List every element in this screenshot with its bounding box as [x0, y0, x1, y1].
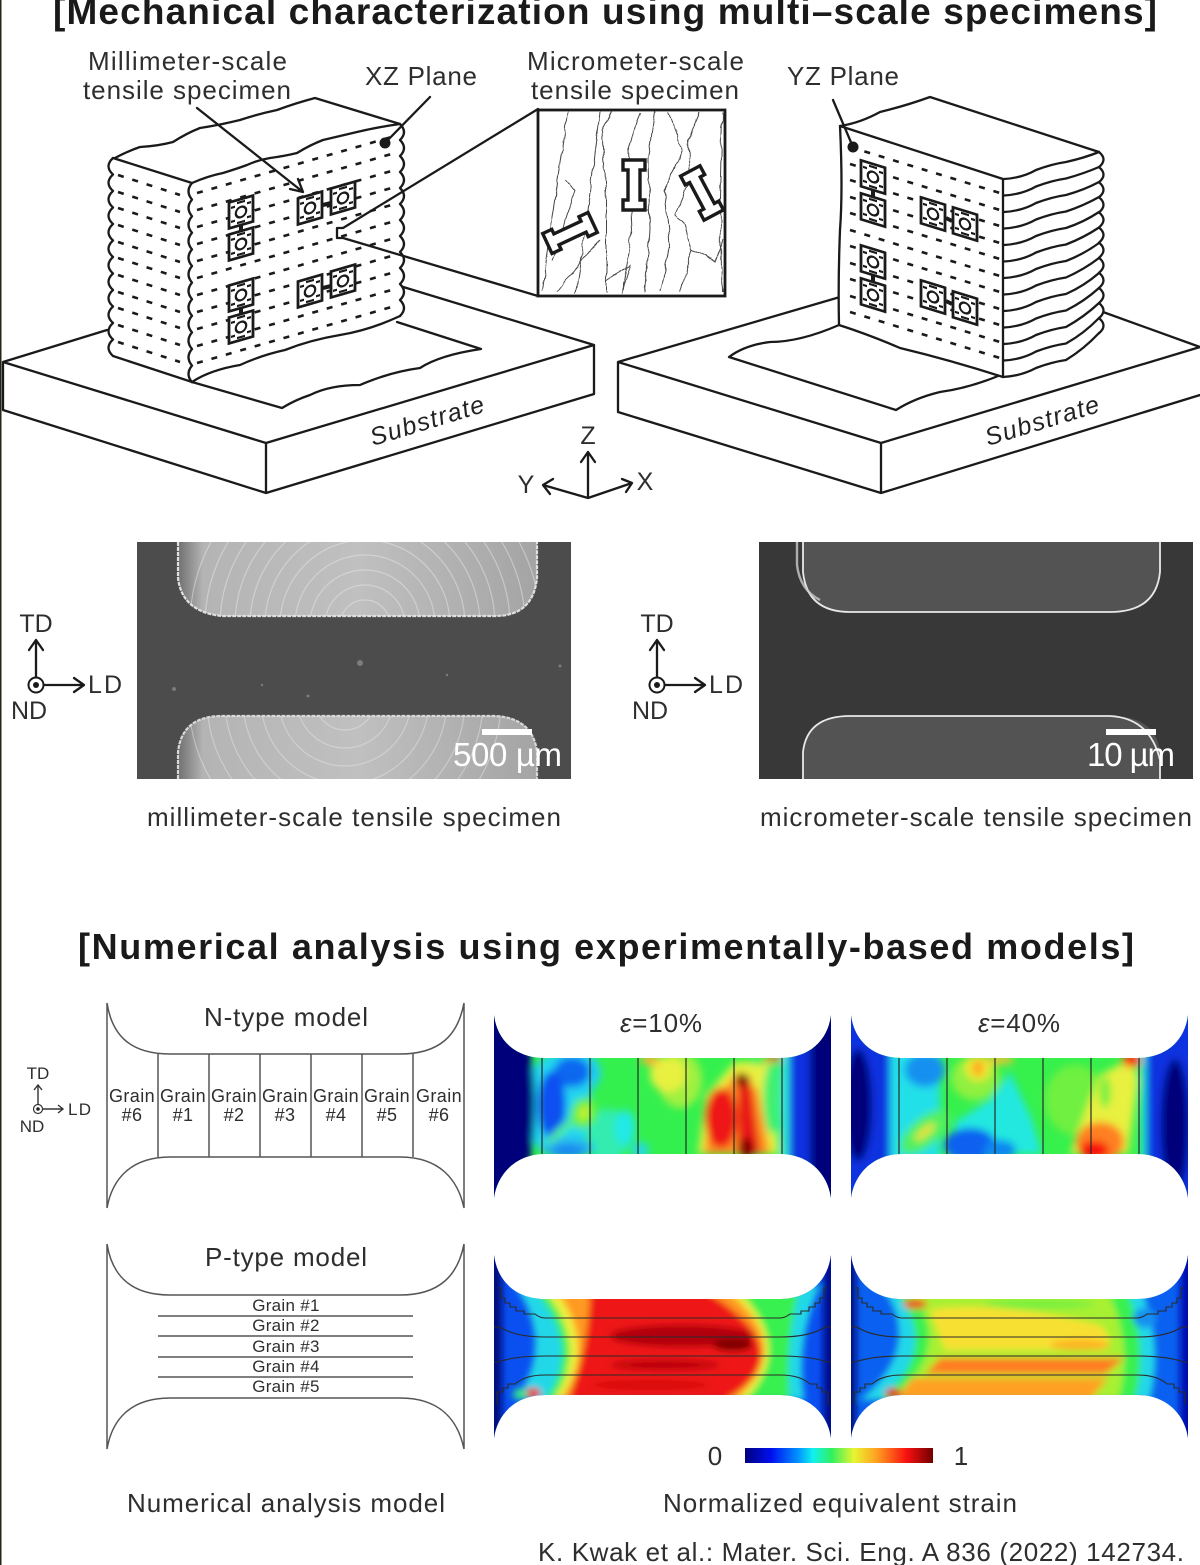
title: numerical analysis: [Numerical analysis using experimentally-based models] — [78, 926, 1134, 967]
model: N-type: Grain — [160, 1086, 206, 1106]
labels: top schematic: tensile specimen — [83, 75, 291, 105]
micrograph: millimeter-scale specimen — [137, 542, 571, 779]
model: N-type: #6 — [429, 1105, 449, 1125]
XZ plane pointer — [380, 97, 430, 148]
axes: TD LD ND right: LD — [709, 671, 743, 699]
heat map: P-type strain 10% — [494, 1255, 831, 1438]
axes: XYZ: X — [637, 468, 654, 496]
model: P-type: P-type model — [205, 1242, 367, 1272]
axes: small TD LD ND: TD — [27, 1064, 49, 1083]
colorbar legend: 0 — [708, 1441, 722, 1471]
millimeter specimen arrow — [197, 108, 303, 192]
axes: TD LD ND right — [632, 610, 743, 725]
model: N-type: Grain — [313, 1086, 359, 1106]
colorbar legend — [708, 1441, 968, 1471]
deposited block: left — [108, 98, 404, 382]
caption: numerical analysis model: Numerical analysis model — [127, 1488, 445, 1518]
model: N-type: #6 — [122, 1105, 142, 1125]
caption: micrometer-scale: micrometer-scale tensile specimen — [760, 802, 1192, 832]
labels: top schematic: Micrometer-scale — [527, 46, 744, 76]
model: P-type: Grain #1 — [252, 1296, 320, 1315]
axes: TD LD ND right: ND — [632, 697, 668, 725]
labels: top schematic: tensile specimen — [531, 75, 739, 105]
schematic: right block on substrate, YZ plane — [618, 97, 1200, 493]
inset: micrometer-scale specimens in grain map — [337, 109, 725, 296]
model: P-type: Grain #2 — [252, 1316, 320, 1335]
tensile specimens: right block — [861, 160, 977, 325]
model: P-type: Grain #4 — [252, 1357, 320, 1376]
model: N-type: #3 — [275, 1105, 295, 1125]
axes: TD LD ND right: TD — [640, 610, 674, 638]
heat map: N-type strain 40%: ε=40% — [978, 1008, 1060, 1038]
axes: XYZ: Y — [518, 471, 535, 499]
model: N-type: #1 — [173, 1105, 193, 1125]
model: N-type: Grain — [109, 1086, 155, 1106]
axes: XYZ: Z — [580, 422, 596, 450]
model: N-type: #5 — [377, 1105, 397, 1125]
model: P-type: Grain #3 — [252, 1337, 320, 1356]
model: N-type: Grain — [364, 1086, 410, 1106]
labels: top schematic — [83, 46, 899, 105]
labels: top schematic: XZ Plane — [365, 61, 477, 91]
substrate: right — [618, 297, 1200, 493]
deposited block: right — [839, 97, 1104, 377]
YZ plane pointer — [833, 100, 858, 152]
axes: small TD LD ND — [20, 1064, 91, 1136]
micrograph: millimeter-scale specimen: 500 µm — [453, 736, 562, 773]
heat map: N-type strain 10%: ε=10% — [620, 1008, 702, 1038]
labels: top schematic: YZ Plane — [787, 61, 899, 91]
colorbar legend: 1 — [954, 1441, 968, 1471]
heat map: N-type strain 10% — [494, 1014, 831, 1198]
model: N-type: #4 — [326, 1105, 346, 1125]
caption: normalized equivalent strain: Normalized equivalent strain — [663, 1488, 1017, 1518]
axes: TD LD ND left: ND — [11, 697, 47, 725]
model: N-type: N-type model — [204, 1002, 368, 1032]
model: N-type: Grain — [211, 1086, 257, 1106]
model: P-type — [107, 1242, 464, 1449]
model: N-type: Grain — [416, 1086, 462, 1106]
model: N-type: #2 — [224, 1105, 244, 1125]
heat map: N-type strain 40% — [851, 1014, 1188, 1198]
axes: TD LD ND left: TD — [19, 610, 53, 638]
axes: TD LD ND left: LD — [88, 671, 122, 699]
axes: small TD LD ND: LD — [68, 1100, 91, 1119]
substrate: left: Substrate — [367, 390, 488, 452]
micrograph: micrometer-scale specimen — [759, 542, 1193, 779]
model: N-type: Grain — [262, 1086, 308, 1106]
axes: TD LD ND left — [11, 610, 122, 725]
axes: XYZ — [518, 422, 654, 499]
tensile specimens: left block — [229, 182, 355, 343]
substrate: left — [3, 286, 594, 493]
model: N-type — [107, 1002, 464, 1208]
heat map: P-type strain 40% — [851, 1255, 1188, 1438]
micrograph: micrometer-scale specimen: 10 µm — [1087, 736, 1175, 773]
axes: small TD LD ND: ND — [20, 1117, 44, 1136]
model: P-type: Grain #5 — [252, 1377, 320, 1396]
labels: top schematic: Millimeter-scale — [88, 46, 287, 76]
substrate: right: Substrate — [982, 390, 1103, 452]
schematic: left block on substrate, XZ plane — [3, 97, 594, 493]
caption: millimeter-scale: millimeter-scale tensile specimen — [147, 802, 561, 832]
